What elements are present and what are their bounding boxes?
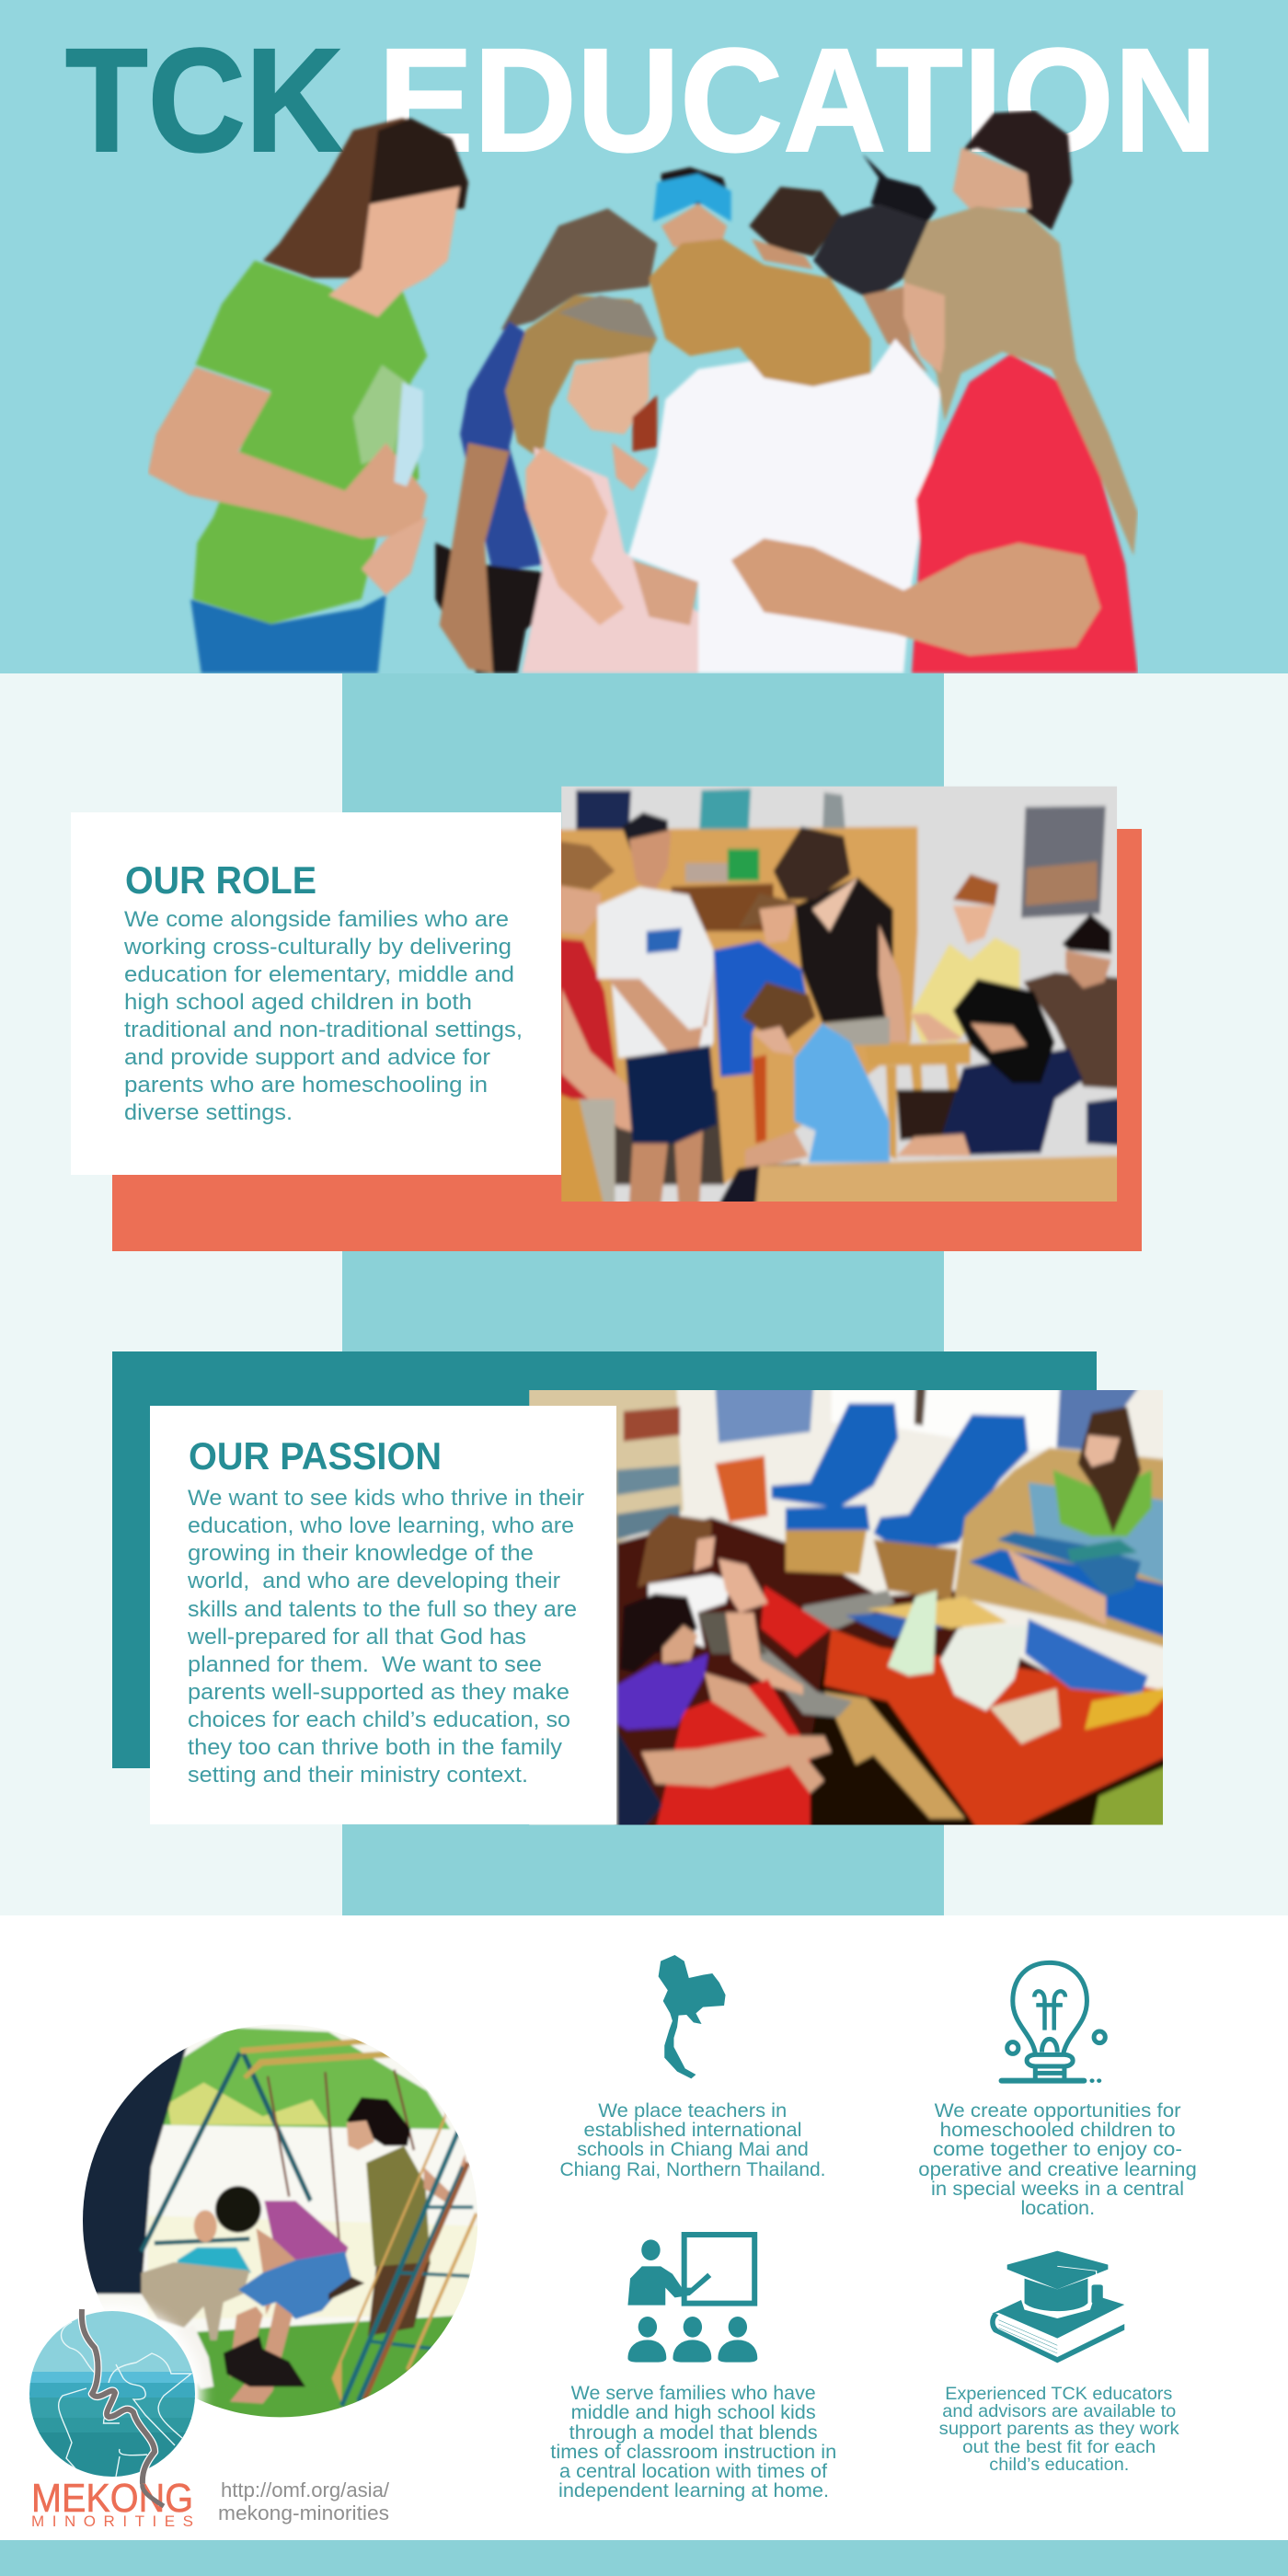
- passion body text: planned for them. We want to see: [188, 1652, 542, 1677]
- text: blended model: middle and high school kids: [571, 2402, 816, 2423]
- text: parent advisors: [939, 2384, 1179, 2475]
- text: homeschool opportunities: in special weeks in a central: [931, 2179, 1184, 2200]
- role body text: We come alongside families who are: [124, 907, 509, 932]
- passion body text: they too can thrive both in the family: [188, 1735, 563, 1760]
- title: EDUCATION: [378, 17, 1217, 182]
- role body text: diverse settings.: [124, 1100, 293, 1125]
- text: homeschool opportunities: come together to enjoy co-: [933, 2139, 1182, 2160]
- passion body text: education, who love learning, who are: [188, 1513, 574, 1538]
- website link: [218, 2478, 390, 2524]
- text: placing teachers: [559, 2100, 826, 2180]
- text: blended model: [550, 2383, 836, 2501]
- role white card: [71, 812, 561, 1175]
- text: homeschool opportunities: operative and creative learning: [918, 2159, 1197, 2180]
- icon: teacher with students: [627, 2235, 757, 2363]
- hero background: [0, 0, 1288, 673]
- passion body text: [187, 1486, 584, 1788]
- passion body text: well-prepared for all that God has: [187, 1625, 526, 1650]
- text: parent advisors: support parents as they work: [939, 2419, 1179, 2439]
- role body text: parents who are homeschooling in: [124, 1073, 488, 1098]
- role body text: high school aged children in both: [124, 990, 472, 1015]
- coral backing block: [112, 829, 1142, 1251]
- text: parent advisors: Experienced TCK educators: [945, 2384, 1173, 2404]
- role photo: family praying at home: [548, 779, 1133, 1207]
- text: blended model: independent learning at home.: [558, 2480, 829, 2501]
- text: blended model: We serve families who have: [571, 2383, 816, 2404]
- central vertical band: [342, 673, 944, 1915]
- icon: graduation cap on book: [990, 2251, 1124, 2363]
- logo globe with river map: [28, 2309, 197, 2484]
- role body text: and provide support and advice for: [124, 1045, 490, 1070]
- text: placing teachers: We place teachers in: [598, 2100, 787, 2122]
- logo white halo: [22, 2305, 202, 2483]
- text: parent advisors: and advisors are available to: [942, 2401, 1176, 2421]
- text: homeschool opportunities: We create opportunities for: [935, 2100, 1181, 2122]
- bottom section background: [0, 1915, 1288, 2540]
- text: parent advisors: child’s education.: [989, 2455, 1129, 2475]
- role body text: traditional and non-traditional settings,: [124, 1018, 523, 1042]
- role body text: education for elementary, middle and: [124, 962, 514, 987]
- passion photo: children and teacher opening gifts: [514, 1385, 1177, 1831]
- teal backing block: [112, 1351, 1097, 1768]
- passion white card: [150, 1406, 616, 1824]
- icon: map of Thailand: [659, 1955, 726, 2078]
- bottom footer band: [0, 2540, 1288, 2576]
- river tail across wordmark: [143, 2484, 164, 2506]
- wordmark MEKONG: MEKONG: [31, 2476, 193, 2521]
- role heading: OUR ROLE: [125, 858, 316, 902]
- passion heading: OUR PASSION: [189, 1434, 442, 1478]
- passion body text: growing in their knowledge of the: [188, 1541, 534, 1566]
- logo: Mekong Minorities: [22, 2305, 202, 2530]
- icon: light bulb: [1002, 1962, 1105, 2083]
- text: homeschool opportunities: [918, 2100, 1197, 2219]
- text: homeschool opportunities: location.: [1021, 2198, 1095, 2219]
- text: placing teachers: schools in Chiang Mai and: [577, 2139, 809, 2160]
- middle section background: [0, 673, 1288, 1915]
- text: blended model: a central location with times of: [559, 2461, 827, 2482]
- title: TCK: [65, 17, 343, 182]
- text: blended model: times of classroom instruction in: [550, 2442, 836, 2463]
- text: homeschool opportunities: homeschooled children to: [940, 2120, 1176, 2141]
- role body text: working cross-culturally by delivering: [123, 935, 512, 960]
- text: parent advisors: out the best fit for each: [962, 2437, 1156, 2457]
- passion body text: setting and their ministry context.: [188, 1763, 528, 1788]
- role body text: [123, 907, 523, 1125]
- wordmark MINORITIES: MINORITIES: [31, 2513, 193, 2530]
- panel: our role: [71, 779, 1142, 1251]
- hero photo: group of teachers and children praying: [148, 110, 1138, 673]
- website link: mekong-minorities: [218, 2501, 389, 2524]
- text: placing teachers: Chiang Rai, Northern Thailand.: [559, 2159, 826, 2180]
- passion body text: skills and talents to the full so they are: [188, 1597, 577, 1622]
- passion body text: world, and who are developing their: [187, 1569, 560, 1593]
- circular photo: swing set in garden: [75, 2015, 487, 2429]
- text: placing teachers: established international: [583, 2120, 802, 2141]
- passion body text: parents well-supported as they make: [188, 1680, 569, 1705]
- text: blended model: through a model that blends: [569, 2422, 818, 2444]
- passion body text: choices for each child’s education, so: [188, 1708, 570, 1732]
- website link: http://omf.org/asia/: [221, 2478, 390, 2501]
- panel: our passion: [112, 1351, 1177, 1831]
- passion body text: We want to see kids who thrive in their: [188, 1486, 584, 1511]
